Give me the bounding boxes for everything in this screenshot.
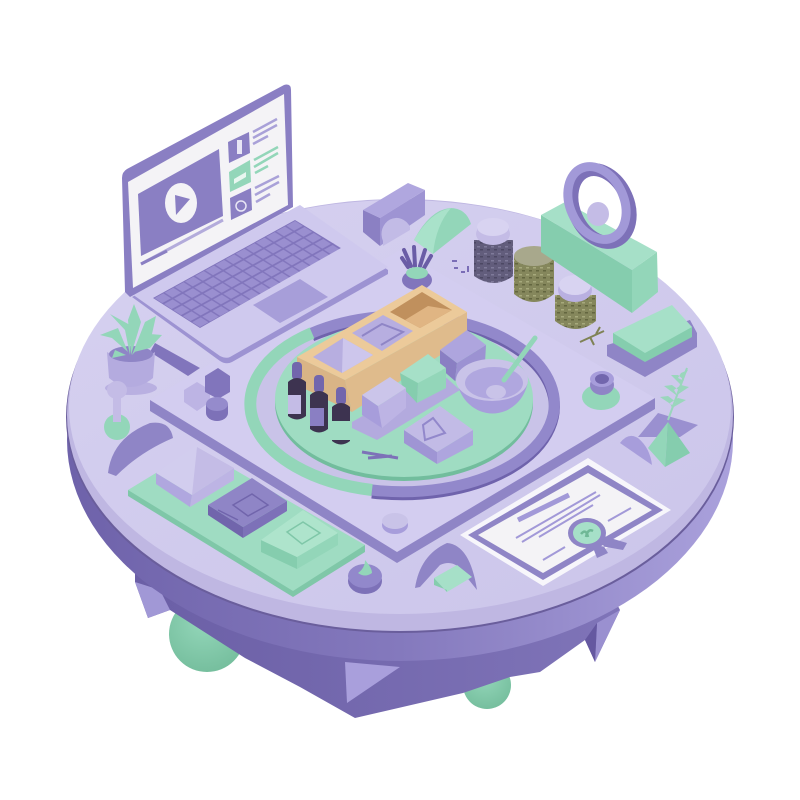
herb jars — [474, 218, 596, 329]
herb sprig — [580, 327, 604, 345]
lavender pot — [402, 247, 432, 290]
certificate text lines — [516, 492, 631, 560]
certificate seal — [590, 535, 627, 558]
block behind laptop — [363, 183, 425, 246]
knob — [348, 560, 382, 594]
small dial — [582, 371, 620, 410]
laptop base — [132, 207, 388, 363]
green box with ring — [541, 157, 658, 313]
soap tray — [128, 448, 365, 597]
green spheres under platform — [169, 596, 511, 709]
purple cube back — [440, 330, 486, 381]
soap 2 — [208, 478, 287, 538]
tray under cubes — [352, 372, 460, 440]
green arch — [414, 208, 471, 254]
lilac cube front — [362, 377, 406, 428]
video panel — [138, 149, 223, 256]
certificate heading bar — [518, 495, 569, 520]
screen icon glyphs — [237, 140, 242, 154]
arch with cube — [415, 543, 477, 592]
dropper bottles — [288, 362, 350, 444]
concentric rings — [250, 316, 554, 495]
plant and pot — [100, 304, 162, 395]
green cube — [400, 354, 446, 403]
platform rim — [66, 201, 734, 661]
laptop keyboard — [153, 220, 341, 328]
envelope block — [404, 406, 473, 464]
wooden box — [297, 285, 467, 412]
progress bar — [141, 220, 223, 264]
slot behind plant — [150, 343, 200, 376]
screen icon tiles — [228, 132, 250, 163]
laptop screen — [122, 85, 293, 297]
laptop trackpad — [253, 279, 328, 323]
bowl and spoon — [456, 338, 535, 414]
soap 3 — [261, 510, 338, 569]
platform top — [67, 199, 733, 631]
play button — [165, 183, 197, 223]
laptop — [122, 85, 388, 363]
pin — [104, 381, 130, 440]
screen text lines — [253, 119, 279, 202]
small button — [382, 513, 408, 534]
pyramid plant — [620, 368, 698, 467]
half disc left — [108, 423, 173, 476]
certificate — [460, 458, 671, 586]
herb seeds — [452, 260, 469, 273]
stacked blocks right — [607, 305, 697, 377]
central plate — [150, 250, 655, 563]
soap 1 — [156, 445, 234, 507]
small cubes — [184, 368, 230, 421]
lavender sprig — [362, 452, 398, 458]
platform underside — [135, 560, 620, 718]
